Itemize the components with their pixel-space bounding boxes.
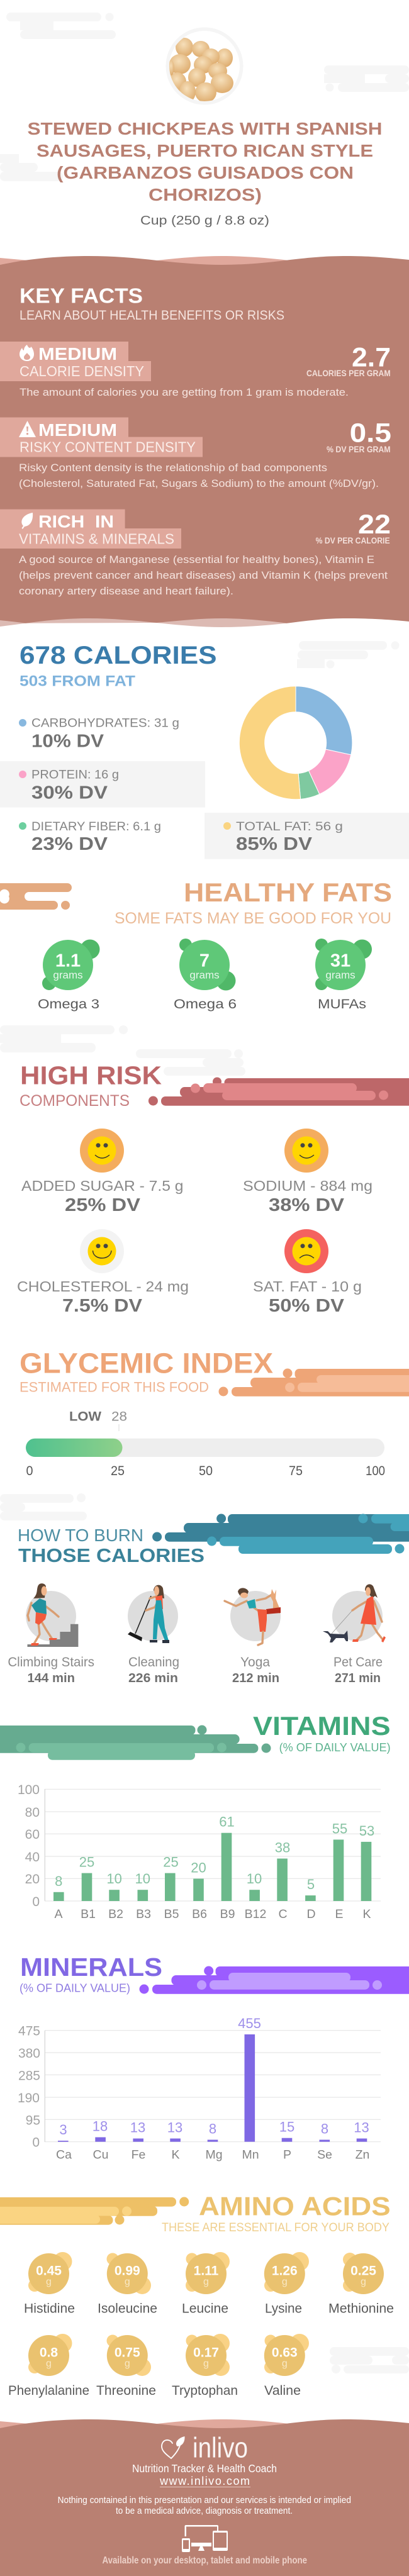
legend: macronutrients: TOTAL FAT: 56 g — [236, 820, 343, 834]
heading: healthy fats: SOME FATS MAY BE GOOD FOR YOU — [115, 910, 391, 927]
vitamins and minerals fact: coronary artery disease and heart failure). — [19, 585, 233, 597]
heading: calories: 678 CALORIES — [20, 642, 216, 669]
heading: how to burn those calories: THOSE CALORIES — [18, 1544, 204, 1566]
bar chart: minerals: 3 — [59, 2122, 67, 2138]
amino acid: lysine: Lysine — [265, 2302, 302, 2316]
gauge: glycemic index: 0 — [26, 1464, 33, 1478]
bar chart: minerals: 190 — [18, 2091, 40, 2105]
legend: macronutrients: 85% DV — [236, 834, 313, 854]
title: STEWED CHICKPEAS WITH SPANISH — [28, 119, 383, 138]
bar chart: minerals: 380 — [18, 2046, 40, 2061]
vitamins and minerals fact: A good source of Manganese (essential for healthy bones), Vitamin E — [19, 554, 374, 566]
heading: calories: 503 FROM FAT — [20, 673, 135, 690]
amino acid: histidine: g — [46, 2277, 52, 2287]
amino acid: lysine: g — [282, 2277, 288, 2287]
bar chart: vitamins: 10 — [135, 1871, 150, 1887]
legend: macronutrients: 23% DV — [31, 834, 108, 854]
icon: stairs figure — [28, 1583, 78, 1647]
bar chart: minerals: 13 — [354, 2120, 369, 2135]
risky content density fact: (Cholesterol, Saturated Fat, Sugars & Sodium) to the amount (%DV/gr). — [19, 477, 379, 489]
bar chart: vitamins: D — [306, 1907, 316, 1921]
activity: yoga — [225, 1588, 281, 1685]
fat: omega 6: 7 — [199, 951, 210, 971]
icon: yoga figure — [225, 1588, 281, 1645]
activity: climbing stairs: 144 min — [28, 1671, 75, 1685]
amino acid: tryptophan: 0.17 — [193, 2346, 219, 2360]
activity: cleaning: 226 min — [128, 1671, 178, 1685]
bar chart: minerals: 18 — [92, 2119, 108, 2134]
website: www.inlivo.com — [159, 2475, 250, 2487]
bar chart: minerals: Cu — [93, 2148, 108, 2162]
amino acid: histidine: 0.45 — [36, 2264, 62, 2278]
bar chart: minerals: 0 — [32, 2136, 40, 2150]
amino acid: tryptophan — [172, 2334, 238, 2398]
icon: devices — [182, 2525, 228, 2552]
fat: omega 3: Omega 3 — [38, 997, 99, 1012]
amino acid: phenylalanine: 0.8 — [40, 2346, 58, 2360]
title — [28, 119, 383, 204]
vitamins and minerals fact: VITAMINS & MINERALS — [19, 531, 174, 547]
heading: high risk: HIGH RISK — [20, 1061, 162, 1090]
logo: inlivo — [162, 2432, 248, 2464]
icon: leaf — [21, 513, 33, 529]
activity: pet care: Pet Care — [333, 1655, 383, 1670]
bar chart: vitamins: 5 — [307, 1876, 315, 1892]
bar chart: minerals: 8 — [321, 2121, 328, 2136]
bar chart: minerals: P — [283, 2148, 291, 2162]
bar chart: minerals: 475 — [18, 2024, 40, 2039]
risk: cholesterol: CHOLESTEROL - 24 mg — [17, 1278, 189, 1295]
gauge: glycemic index — [26, 1410, 385, 1478]
bar chart: vitamins: B9 — [220, 1907, 235, 1921]
disclaimer: Nothing contained in this presentation and our services is intended or implied — [58, 2495, 351, 2506]
risk: sodium: SODIUM - 884 mg — [243, 1178, 373, 1194]
heading: healthy fats — [0, 878, 392, 927]
bar chart: minerals: 455 — [238, 2016, 261, 2031]
bar chart: minerals: Zn — [356, 2148, 369, 2162]
heading: glycemic index: ESTIMATED FOR THIS FOOD — [20, 1380, 209, 1395]
fat: MUFAs: MUFAs — [318, 997, 366, 1012]
calorie density fact: MEDIUM — [38, 344, 117, 364]
risk: sodium: 38% DV — [269, 1195, 345, 1215]
bar chart: vitamins: 53 — [359, 1823, 374, 1839]
bar chart: minerals: 13 — [130, 2120, 145, 2135]
gauge: glycemic index: 100 — [366, 1464, 385, 1478]
risky content density fact: RISKY CONTENT DENSITY — [20, 439, 196, 455]
activity: yoga: Yoga — [240, 1655, 270, 1670]
disclaimer — [58, 2495, 351, 2516]
heading: how to burn those calories: HOW TO BURN — [18, 1525, 143, 1545]
bar chart: minerals: 13 — [167, 2120, 182, 2135]
amino acid: lysine — [264, 2252, 309, 2316]
amino acid: valine: g — [282, 2358, 288, 2369]
fat: MUFAs: grams — [325, 969, 356, 981]
vitamins and minerals fact: 22 — [358, 510, 391, 540]
fat: omega 3: 1.1 — [55, 951, 81, 971]
bar chart: vitamins — [18, 1783, 381, 1921]
gauge: glycemic index: LOW — [69, 1410, 101, 1424]
bar chart: minerals: K — [171, 2148, 180, 2162]
activity: climbing stairs — [8, 1583, 94, 1685]
amino acid: valine: Valine — [264, 2384, 301, 2398]
amino acid: threonine: Threonine — [96, 2384, 156, 2398]
bar chart: minerals: 15 — [279, 2119, 294, 2135]
bar chart: minerals — [18, 2016, 381, 2162]
amino acid: leucine: g — [203, 2277, 209, 2287]
risk: cholesterol — [17, 1229, 189, 1316]
amino acid: histidine — [24, 2252, 75, 2316]
risky content density fact: Risky Content density is the relationship of bad components — [19, 462, 327, 474]
bar chart: vitamins: 55 — [332, 1820, 347, 1836]
amino acid: methionine — [328, 2253, 394, 2316]
heading: vitamins: VITAMINS — [253, 1711, 391, 1741]
amino acid: threonine: g — [125, 2358, 130, 2369]
amino acid: valine — [264, 2334, 309, 2398]
risk: cholesterol: 7.5% DV — [62, 1296, 143, 1316]
amino acid: valine: 0.63 — [272, 2346, 298, 2360]
fat: omega 3 — [38, 940, 99, 1012]
bar chart: vitamins: B6 — [192, 1907, 207, 1921]
fat: MUFAs — [315, 939, 372, 1012]
calorie density fact: The amount of calories you are getting from 1 gram is moderate. — [20, 386, 349, 398]
heading: glycemic index — [20, 1347, 409, 1397]
activity: yoga: 212 min — [232, 1671, 279, 1685]
bar chart: vitamins: B2 — [108, 1907, 123, 1921]
bar chart: minerals: Fe — [132, 2148, 145, 2162]
vitamins and minerals fact: RICH IN — [38, 512, 114, 531]
fat: MUFAs: 31 — [330, 951, 350, 971]
gauge: glycemic index: 28 — [111, 1410, 127, 1424]
amino acid: methionine: Methionine — [328, 2302, 394, 2316]
heading: high risk — [20, 1061, 409, 1110]
bar chart: vitamins: 60 — [25, 1827, 40, 1842]
gauge: glycemic index: 25 — [111, 1464, 125, 1478]
amino acid: threonine — [96, 2335, 156, 2398]
legend: macronutrients: PROTEIN: 16 g — [31, 768, 119, 782]
amino acid: methionine: g — [361, 2277, 366, 2287]
risk: added sugar: 25% DV — [65, 1195, 141, 1215]
bar chart: vitamins: 0 — [32, 1895, 40, 1909]
bar chart: vitamins: 10 — [247, 1871, 262, 1887]
risky content density fact — [0, 418, 391, 489]
bar chart: vitamins: C — [278, 1907, 288, 1921]
heading: vitamins: (% OF DAILY VALUE) — [279, 1741, 391, 1754]
key facts heading: LEARN ABOUT HEALTH BENEFITS OR RISKS — [20, 308, 284, 323]
donut chart — [239, 686, 352, 800]
amino acid: phenylalanine — [8, 2334, 89, 2398]
fat: omega 3: grams — [53, 969, 83, 981]
amino acid: tryptophan: g — [203, 2358, 209, 2369]
bar chart: vitamins: B1 — [81, 1907, 96, 1921]
risky content density fact: MEDIUM — [38, 420, 117, 440]
amino acid: tryptophan: Tryptophan — [172, 2384, 238, 2398]
key facts heading: KEY FACTS — [20, 284, 143, 307]
panel: footer — [0, 2419, 409, 2576]
availability note: Available on your desktop, tablet and mobile phone — [102, 2555, 307, 2566]
heading: minerals: MINERALS — [20, 1953, 162, 1982]
bar chart: vitamins: E — [335, 1907, 344, 1921]
bar chart: vitamins: 38 — [275, 1839, 290, 1856]
bar chart: vitamins: B5 — [164, 1907, 179, 1921]
legend: macronutrients — [0, 716, 409, 859]
legend: macronutrients: 10% DV — [31, 732, 104, 752]
bar chart: vitamins: B12 — [245, 1907, 266, 1921]
heading: amino acids — [0, 2192, 391, 2234]
heading: amino acids: THESE ARE ESSENTIAL FOR YOUR BODY — [162, 2221, 389, 2234]
amino acid: leucine: Leucine — [182, 2302, 228, 2316]
bar chart: vitamins: 25 — [163, 1854, 179, 1870]
amino acid: leucine: 1.11 — [194, 2264, 219, 2278]
bar chart: minerals: 285 — [18, 2068, 40, 2083]
fat: omega 6: Omega 6 — [174, 997, 237, 1012]
bar chart: minerals: 8 — [209, 2121, 216, 2136]
risk: saturated fat: 50% DV — [269, 1296, 345, 1316]
amino acid: isoleucine: Isoleucine — [98, 2302, 157, 2316]
heading: calories — [20, 642, 216, 690]
amino acid: phenylalanine: g — [46, 2358, 52, 2369]
amino acid: isoleucine: g — [125, 2277, 130, 2287]
risk: sodium — [243, 1129, 373, 1215]
calorie density fact — [0, 342, 391, 398]
bar chart: vitamins: 8 — [55, 1873, 62, 1889]
icon: warning — [19, 421, 36, 437]
activity: cleaning — [128, 1585, 179, 1685]
bar chart: vitamins: A — [54, 1907, 63, 1921]
gauge: glycemic index: 75 — [289, 1464, 303, 1478]
tagline: Nutrition Tracker & Health Coach — [132, 2462, 277, 2475]
heading: healthy fats: HEALTHY FATS — [184, 878, 392, 907]
bar chart: vitamins: 80 — [25, 1805, 40, 1820]
icon: flame — [20, 345, 34, 361]
bar chart: vitamins: 20 — [25, 1872, 40, 1887]
bar chart: minerals: Ca — [56, 2148, 72, 2162]
panel: key facts — [0, 256, 409, 627]
activity: pet care — [323, 1584, 386, 1685]
gauge: glycemic index: 50 — [199, 1464, 213, 1478]
risky content density fact: 0.5 — [350, 418, 391, 449]
legend: macronutrients: DIETARY FIBER: 6.1 g — [31, 820, 161, 834]
bar chart: minerals: 95 — [26, 2113, 40, 2127]
calorie density fact: CALORIE DENSITY — [20, 363, 144, 379]
heading: glycemic index: GLYCEMIC INDEX — [20, 1347, 273, 1380]
bar chart: minerals: Mg — [205, 2148, 223, 2162]
food photo: chickpeas — [166, 28, 243, 104]
calorie density fact: 2.7 — [352, 343, 391, 373]
bar chart: vitamins: K — [362, 1907, 371, 1921]
risk: saturated fat: SAT. FAT - 10 g — [253, 1278, 362, 1295]
heading: minerals — [20, 1953, 409, 1995]
bar chart: vitamins: 61 — [219, 1814, 235, 1830]
risk: saturated fat — [253, 1229, 362, 1316]
disclaimer: to be a medical advice, diagnosis or treatment. — [116, 2506, 293, 2516]
vitamins and minerals fact — [0, 510, 391, 597]
vitamins and minerals fact: (helps prevent cancer and heart diseases) and Vitamin K (helps prevent — [19, 569, 388, 581]
bar chart: vitamins: 100 — [18, 1783, 40, 1797]
icon: cleaning figure — [128, 1585, 169, 1643]
logo: inlivo: inlivo — [193, 2432, 248, 2464]
activity: cleaning: Cleaning — [128, 1655, 179, 1670]
heading: amino acids: AMINO ACIDS — [199, 2192, 391, 2221]
bar chart: vitamins: 40 — [25, 1850, 40, 1865]
heading: minerals: (% OF DAILY VALUE) — [20, 1982, 130, 1995]
amino acid: threonine: 0.75 — [115, 2346, 140, 2360]
title: CHORIZOS) — [148, 185, 262, 204]
amino acid: phenylalanine: Phenylalanine — [8, 2384, 89, 2398]
amino acid: isoleucine — [98, 2253, 157, 2316]
title: (GARBANZOS GUISADOS CON — [57, 163, 354, 182]
risk: added sugar — [21, 1129, 184, 1215]
legend: macronutrients: 30% DV — [31, 783, 108, 803]
heading: high risk: COMPONENTS — [20, 1092, 130, 1110]
amino acid: methionine: 0.25 — [350, 2264, 376, 2278]
heading: vitamins — [0, 1711, 391, 1760]
key facts heading — [20, 284, 284, 323]
title: SAUSAGES, PUERTO RICAN STYLE — [36, 141, 373, 160]
bar chart: vitamins: 25 — [79, 1854, 94, 1870]
vitamins and minerals fact: % DV PER CALORIE — [316, 536, 390, 545]
legend: macronutrients: CARBOHYDRATES: 31 g — [31, 716, 179, 730]
activity: climbing stairs: Climbing Stairs — [8, 1655, 94, 1670]
amino acid: lysine: 1.26 — [272, 2264, 298, 2278]
calorie density fact: CALORIES PER GRAM — [306, 369, 391, 378]
bar chart: vitamins: 20 — [191, 1860, 206, 1876]
amino acid: histidine: Histidine — [24, 2302, 75, 2316]
risk: added sugar: ADDED SUGAR - 7.5 g — [21, 1178, 184, 1194]
heading: how to burn those calories — [18, 1514, 409, 1566]
bar chart: minerals: Se — [317, 2148, 332, 2162]
amino acid: isoleucine: 0.99 — [115, 2264, 140, 2278]
bar chart: minerals: Mn — [242, 2148, 259, 2162]
fat: omega 6: grams — [189, 969, 220, 981]
amino acid: leucine — [182, 2252, 230, 2316]
bar chart: vitamins: 10 — [106, 1871, 122, 1887]
serving size: Cup (250 g / 8.8 oz) — [140, 214, 269, 228]
activity: pet care: 271 min — [335, 1671, 381, 1685]
icon: pet care figure — [323, 1584, 386, 1642]
risky content density fact: % DV PER GRAM — [327, 445, 391, 454]
fat: omega 6 — [174, 939, 237, 1012]
bar chart: vitamins: B3 — [136, 1907, 151, 1921]
